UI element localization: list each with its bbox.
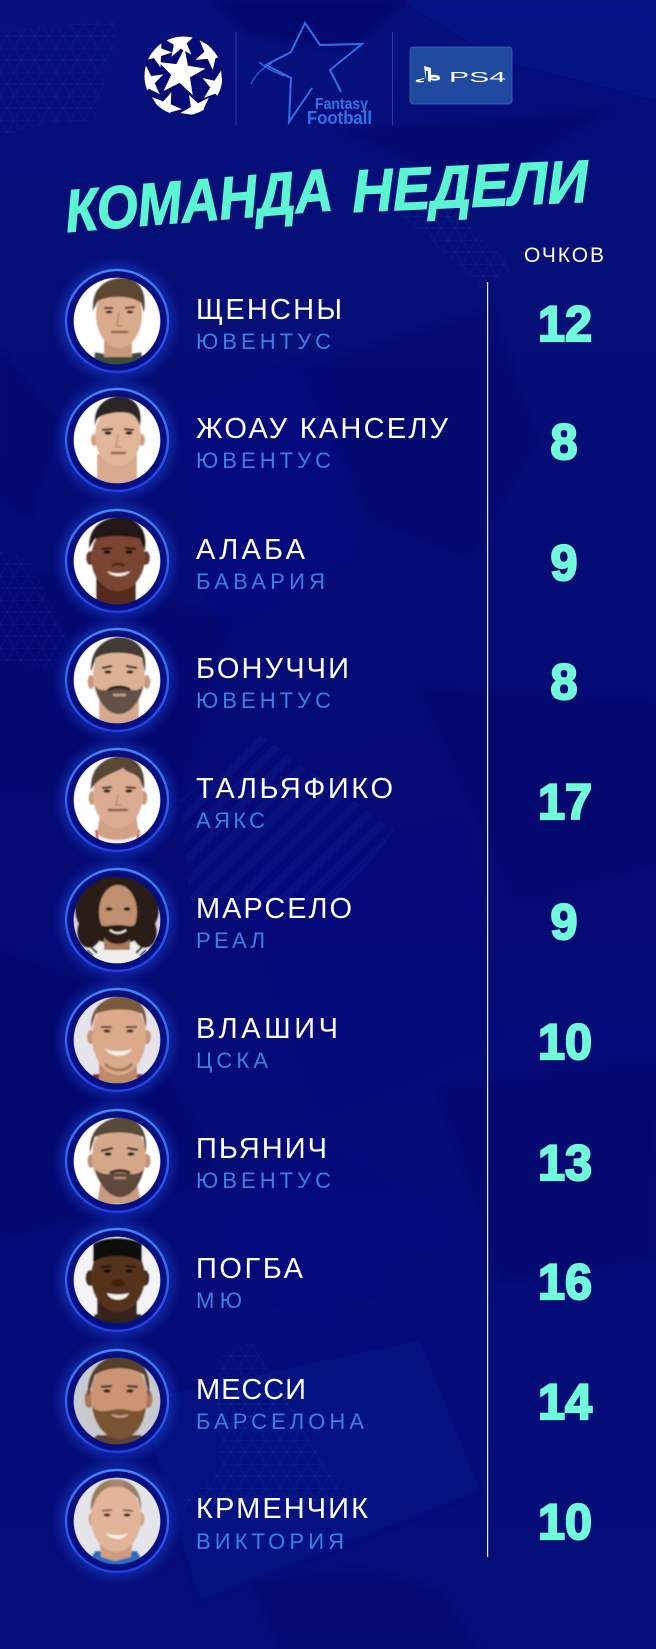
title (63, 148, 591, 245)
column divider (487, 282, 488, 1557)
player row: Влашич (66, 989, 592, 1091)
avatar ring (66, 629, 168, 731)
title word 1: КОМАНДА (63, 156, 335, 245)
points: 14 (538, 1374, 592, 1430)
team: РЕАЛ (196, 928, 265, 953)
player photo (73, 1355, 161, 1445)
team: ЮВЕНТУС (196, 688, 331, 713)
player name: ТАЛЬЯФИКО (196, 773, 393, 805)
player name: ПЬЯНИЧ (196, 1133, 327, 1165)
logo text: fantasy: Fantasy (315, 96, 368, 113)
avatar ring (66, 1110, 168, 1212)
team: ЮВЕНТУС (196, 1168, 331, 1193)
player row: Марсело (66, 869, 578, 971)
player row: Крменчик (66, 1470, 592, 1572)
team: ЦСКА (196, 1048, 268, 1073)
divider (236, 32, 237, 125)
icon: playstation 4 badge (410, 47, 512, 104)
points: 9 (550, 535, 578, 591)
icon: champions league starball (144, 36, 222, 115)
points: 16 (538, 1254, 592, 1310)
player row: Погба (66, 1229, 592, 1331)
team: ВИКТОРИЯ (196, 1529, 344, 1554)
player name: ВЛАШИЧ (196, 1013, 338, 1045)
avatar ring (66, 270, 168, 372)
team: ЮВЕНТУС (196, 448, 331, 473)
player name: МАРСЕЛО (196, 893, 352, 925)
avatar ring (66, 749, 168, 851)
team: БАРСЕЛОНА (196, 1409, 364, 1434)
points: 10 (538, 1014, 592, 1070)
points: 17 (538, 774, 592, 830)
player row: Жоау Канселу (66, 389, 578, 491)
avatar ring (66, 1229, 168, 1331)
team: АЯКС (196, 808, 265, 833)
player photo (73, 756, 161, 844)
ps4 wordmark: PS4 (449, 69, 506, 86)
player photo (73, 1117, 161, 1205)
points: 13 (538, 1135, 592, 1191)
points: 12 (538, 296, 592, 352)
player row: Бонуччи (66, 629, 578, 731)
title word 2: НЕДЕЛИ (351, 148, 591, 225)
player photo (73, 396, 161, 484)
logo text: football: Football (307, 108, 372, 128)
team: ЮВЕНТУС (196, 329, 331, 354)
avatar ring (66, 1350, 168, 1452)
team: МЮ (196, 1288, 242, 1313)
player name: МЕССИ (196, 1374, 306, 1406)
player name: ПОГБА (196, 1253, 304, 1285)
points: 10 (538, 1494, 592, 1550)
player name: КРМЕНЧИК (196, 1493, 368, 1525)
player row: Тальяфико (66, 749, 592, 851)
player row: Щенсны (66, 270, 592, 372)
icon: fantasy football star (251, 23, 372, 128)
team: БАВАРИЯ (196, 569, 325, 594)
player row: Алаба (66, 510, 578, 612)
points: 8 (550, 654, 578, 710)
player photo (73, 517, 161, 607)
player photo (73, 636, 161, 724)
column header: points: ОЧКОВ (524, 244, 604, 267)
player name: БОНУЧЧИ (196, 653, 349, 685)
avatar ring (66, 989, 168, 1091)
player photo (73, 996, 161, 1084)
player row: Пьянич (66, 1110, 592, 1212)
player name: ЩЕНСНЫ (196, 294, 342, 326)
player row: Месси (66, 1350, 592, 1452)
points: 8 (550, 414, 578, 470)
avatar ring (66, 1470, 168, 1572)
avatar ring (66, 869, 168, 971)
player photo (73, 876, 161, 964)
avatar ring (66, 510, 168, 612)
player name: ЖОАУ КАНСЕЛУ (196, 413, 449, 445)
player photo (73, 1236, 161, 1324)
player name: АЛАБА (196, 534, 306, 566)
player photo (73, 277, 161, 365)
divider (392, 32, 393, 125)
points: 9 (550, 894, 578, 950)
logos row (130, 23, 512, 130)
player photo (73, 1477, 161, 1565)
avatar ring (66, 389, 168, 491)
